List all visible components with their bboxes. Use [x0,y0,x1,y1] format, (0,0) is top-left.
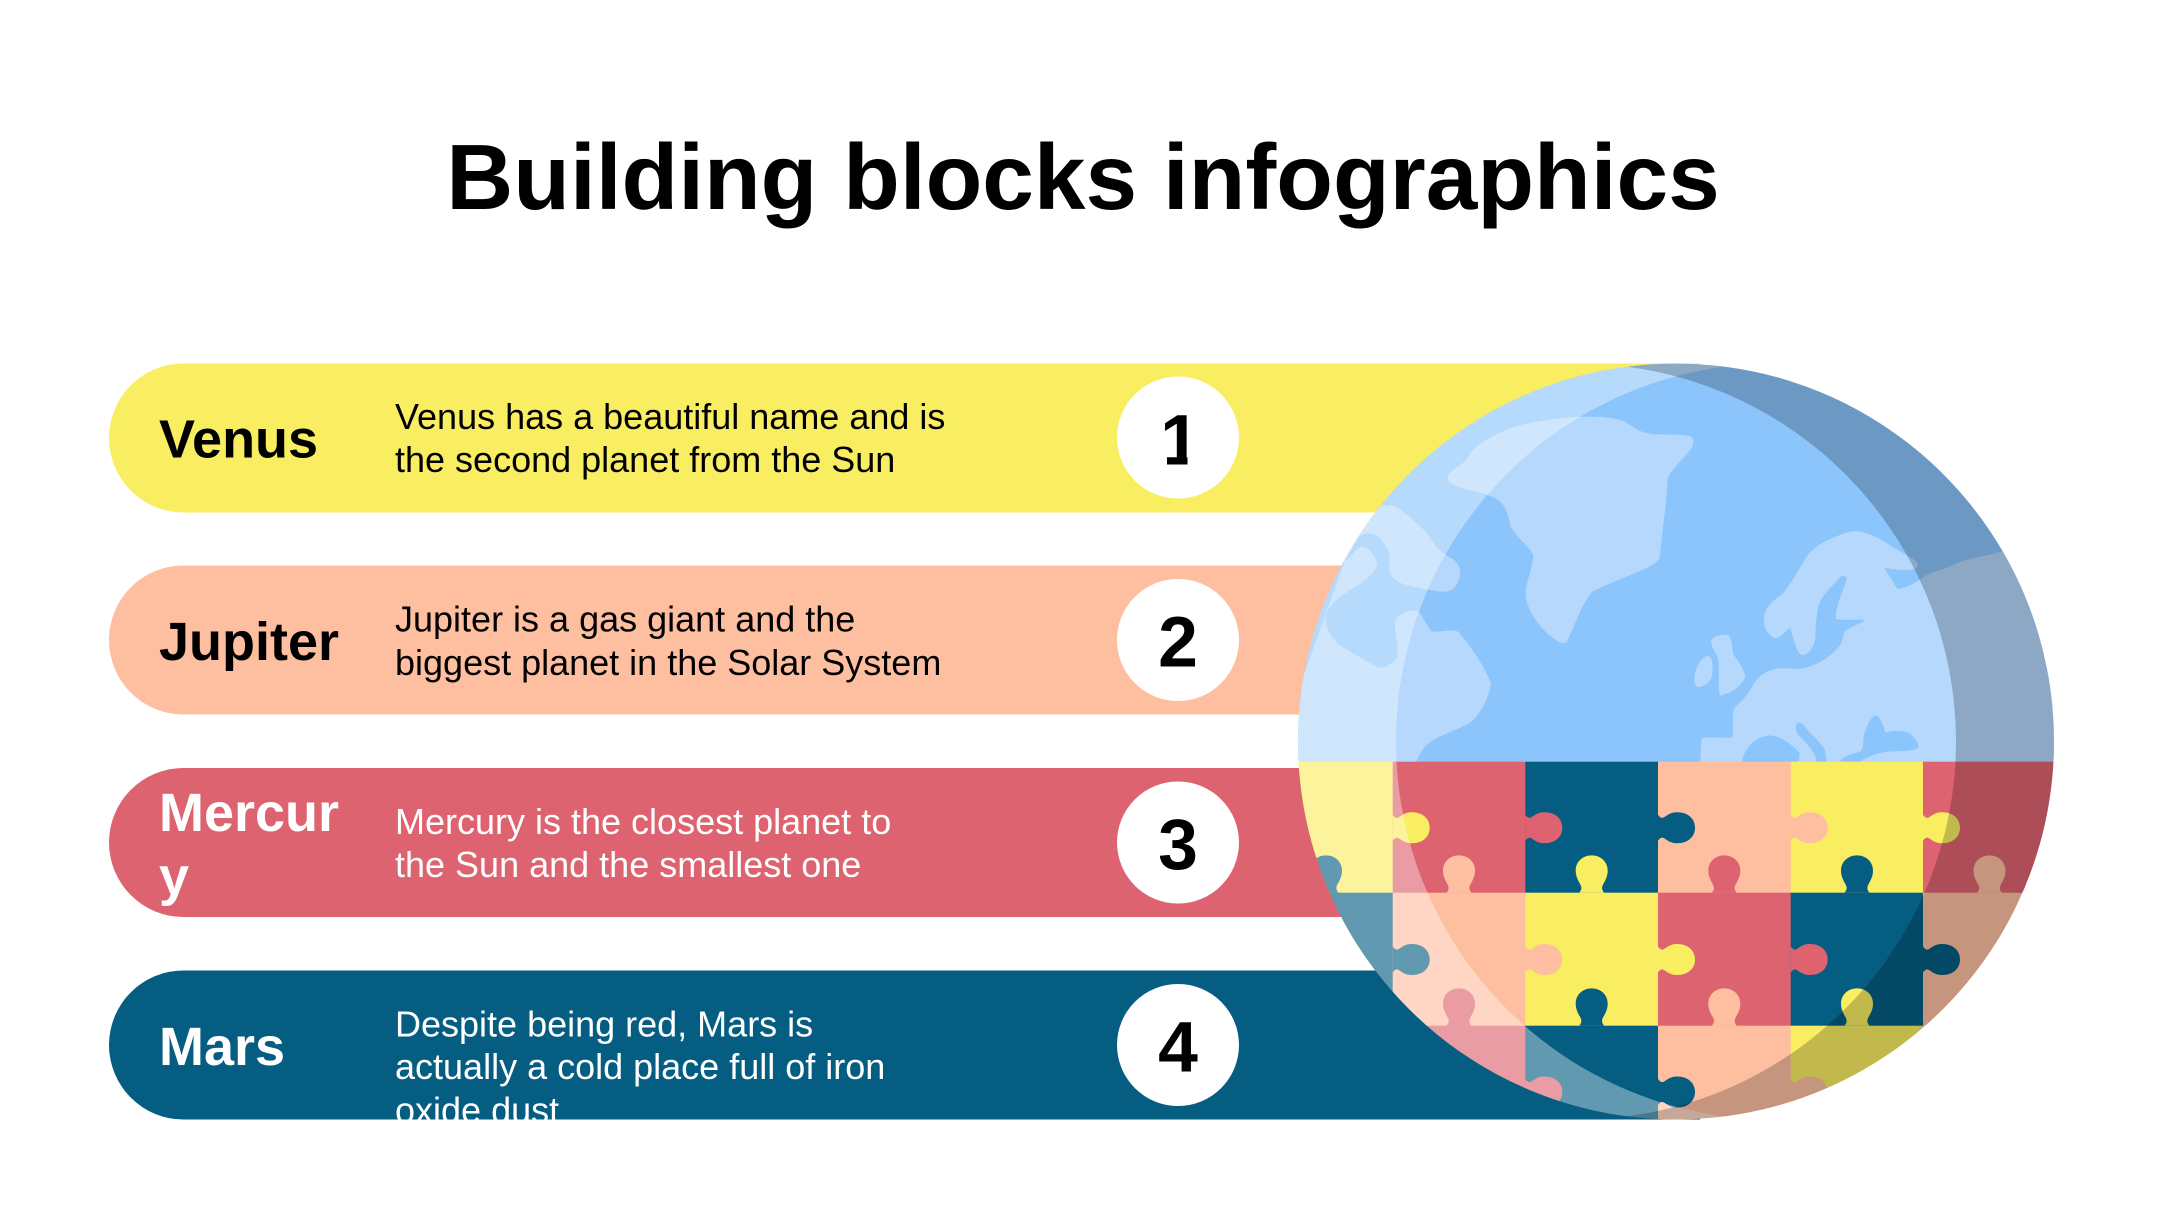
Mars description: Despite being red, Mars is [395,1004,813,1044]
Venus description: the second planet from the Sun [395,439,895,480]
puzzle pieces [1298,762,2054,1120]
Mercury name: y [159,847,189,907]
puzzle top knobs [1310,855,2006,1026]
number 3 badge: 3 [1158,805,1198,885]
puzzle row 3 [1426,1026,1924,1120]
number 3 badge [1117,782,1239,904]
Jupiter description: biggest planet in the Solar System [395,642,941,683]
panel: Jupiter row [109,566,1700,714]
Mercury description: Mercury is the closest planet to [395,801,891,842]
number 2 badge: 2 [1158,603,1198,683]
globe dark crescent [1626,364,2054,1120]
Mars description [396,1010,883,1120]
puzzle row 2 [1330,892,2022,1026]
panel: Mars row [109,970,1700,1130]
Venus pill [109,364,1700,512]
europe and islands [1694,531,2054,762]
Mars description: actually a cold place full of iron [395,1046,885,1087]
Venus name: Venus [159,410,318,470]
Mercury name: Mercur [159,783,339,843]
puzzle row 1 [1260,762,2063,893]
Jupiter name: Jupiter [159,612,339,672]
Jupiter description: Jupiter is a gas giant and the [395,598,855,640]
number 4 badge [1117,984,1239,1106]
globe made of puzzle pieces [1298,364,2054,1120]
puzzle side knobs [1393,812,1960,1108]
Mars description: oxide dust [395,1090,559,1130]
Venus description: Venus has a beautiful name and is [395,396,945,437]
globe light crescent [1298,364,1724,1120]
panel: Venus row [109,364,1700,512]
Mars name: Mars [159,1017,285,1077]
number 1 badge [1117,376,1239,498]
Mercury description: the Sun and the smallest one [395,844,861,885]
Mercury pill [109,768,1700,917]
Mars pill [109,970,1700,1120]
number 4 badge: 4 [1158,1008,1198,1088]
Jupiter pill [109,566,1700,714]
title: Building blocks infographics [446,125,1720,229]
number 1 badge: 1 [1160,400,1200,480]
globe continents [1295,417,2093,763]
globe ocean [1298,364,2054,762]
panel: Mercury row [109,768,1700,917]
west continents [1295,417,1693,763]
number 2 badge [1117,579,1239,701]
